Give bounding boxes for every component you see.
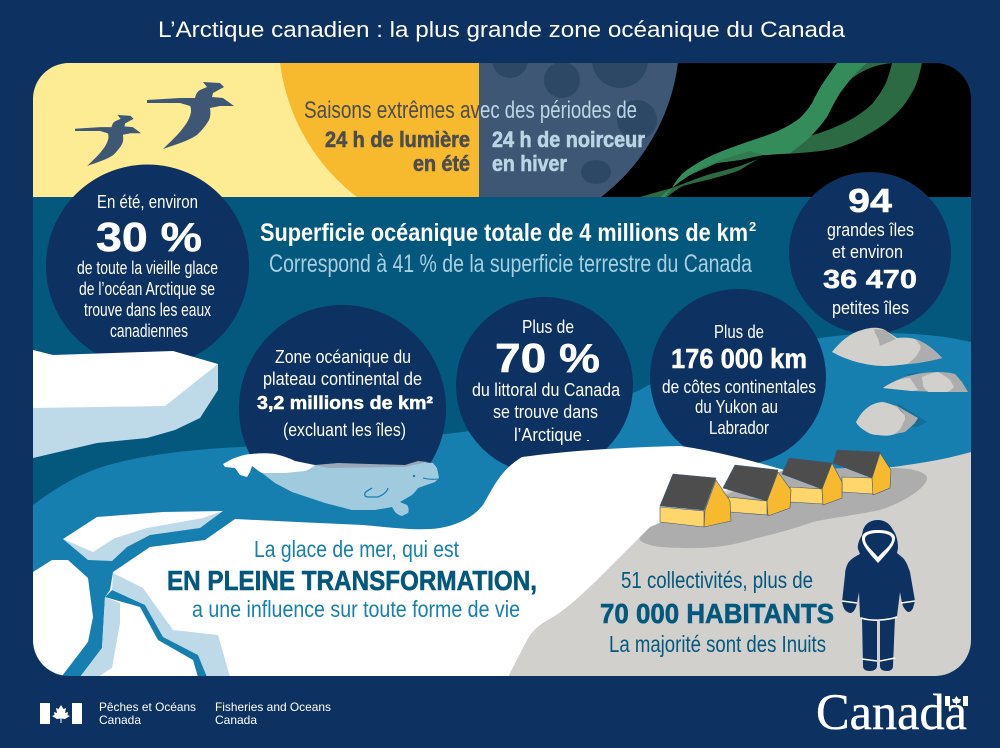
- boot bands: [862, 658, 895, 661]
- icon: person in parka: [842, 520, 915, 671]
- shelf zone text: Zone océanique du: [275, 347, 411, 367]
- islands text: [823, 182, 917, 318]
- icon: moon: [479, 63, 678, 197]
- water crack: [105, 590, 207, 677]
- house 1: [660, 474, 731, 527]
- circle: 30 percent old ice: [46, 164, 249, 368]
- disc: [650, 289, 826, 465]
- islands text: grandes îles: [827, 220, 914, 240]
- land: [508, 452, 971, 677]
- text: extreme seasons: 24 h de noirceur: [492, 127, 645, 152]
- island 2: [883, 372, 968, 392]
- circle: shelf zone: [239, 305, 446, 465]
- text: communities: 51 collectivités, plus de: [621, 567, 813, 593]
- ocean background: [33, 197, 971, 677]
- mouth: [423, 478, 438, 479]
- sea ice with cracks: [33, 446, 784, 677]
- disc: [239, 305, 446, 465]
- circle: islands: [789, 172, 951, 334]
- cuffs and hem: [842, 601, 915, 620]
- eye: [413, 475, 415, 477]
- winter sky: [601, 63, 971, 197]
- shelf zone text: (excluant les îles): [283, 420, 406, 440]
- department name English: [215, 700, 331, 727]
- coast length text: de côtes continentales: [662, 377, 816, 397]
- icon: bird large: [147, 82, 234, 149]
- coast length text: du Yukon au: [695, 397, 778, 417]
- ice edge light strip right: [112, 573, 230, 677]
- department name French: [99, 700, 196, 727]
- logo: Government of Canada flag: [40, 703, 82, 724]
- old ice text: de l’océan Arctique se: [79, 279, 215, 299]
- text: communities: [600, 567, 834, 657]
- old ice text: trouve dans les eaux: [84, 300, 211, 320]
- text: extreme seasons: en hiver: [492, 151, 567, 176]
- coastline text: Plus de: [522, 317, 574, 337]
- text: communities: La majorité sont des Inuits: [609, 631, 826, 657]
- islands text: petites îles: [832, 298, 909, 318]
- circle: 70 percent coastline: [456, 297, 633, 474]
- text: sea ice: EN PLEINE TRANSFORMATION,: [167, 565, 537, 596]
- text: extreme seasons: 24 h de lumière: [325, 127, 470, 152]
- flipper: [365, 488, 388, 497]
- hood opening: [862, 530, 895, 563]
- island 3: [856, 402, 927, 436]
- circle: 176 000 km coast: [650, 289, 826, 465]
- text: sea ice: La glace de mer, qui est: [254, 536, 460, 562]
- text: extreme seasons: Saisons extrêmes av: [304, 97, 480, 124]
- coastline text: se trouve dans: [493, 402, 598, 422]
- ice edge light strip left: [80, 597, 120, 677]
- department name French: Canada: [99, 713, 141, 727]
- island 1: [832, 328, 942, 366]
- panel: sky: [33, 63, 971, 197]
- iceberg: [33, 350, 218, 458]
- islands text: 94: [848, 182, 893, 219]
- shallow water: [33, 333, 971, 676]
- old ice text: de toute la vieille glace: [77, 258, 218, 278]
- department name English: Fisheries and Oceans: [215, 700, 331, 714]
- disc: [46, 164, 249, 368]
- coastline text: l’Arctique: [514, 425, 582, 445]
- coast length text: [662, 322, 816, 438]
- coastline text: 70 %: [495, 335, 600, 381]
- shelf zone text: 3,2 millions de km²: [257, 393, 433, 413]
- house 2: [723, 465, 791, 516]
- islands text: 36 470: [823, 264, 917, 294]
- main ice shelf: [80, 446, 784, 677]
- Canada wordmark: Canada: [816, 685, 967, 741]
- icon: houses: [660, 450, 891, 527]
- coast length text: Plus de: [714, 322, 764, 342]
- islands text: et environ: [832, 242, 903, 262]
- text: extreme seasons: [304, 97, 645, 176]
- text: sea ice: [167, 536, 537, 622]
- text: extreme seasons: ec des périodes de: [480, 97, 637, 124]
- text: sea ice: a une influence sur toute forme de vie: [192, 596, 520, 622]
- coast length text: 176 000 km: [671, 343, 807, 374]
- house 4: [833, 450, 891, 495]
- shelf zone text: [257, 347, 433, 440]
- old ice text: canadiennes: [110, 321, 188, 341]
- text: extreme seasons: en été: [413, 151, 470, 176]
- white back and tail: [223, 453, 315, 477]
- disc: [789, 172, 951, 334]
- aurora borealis: [640, 63, 922, 197]
- old ice text: En été, environ: [97, 192, 198, 212]
- old ice text: [77, 192, 218, 341]
- parka: [842, 520, 915, 621]
- icon: bird small: [75, 115, 141, 166]
- shelf zone text: plateau continental de: [263, 369, 422, 389]
- icon: islands: [832, 328, 968, 436]
- text: communities: 70 000 HABITANTS: [600, 598, 834, 629]
- moon disc: [479, 63, 678, 197]
- summer sky: [33, 63, 357, 197]
- subheading: ocean share: Correspond à 41 % de la superficie terrestre du Canada: [269, 250, 752, 278]
- icon: beluga whale: [223, 453, 439, 516]
- legs: [862, 617, 895, 671]
- title: L’Arctique canadien : la plus grande zone océanique du Canada: [158, 17, 846, 42]
- heading: ocean area: 2: [749, 219, 756, 234]
- heading: ocean area: Superficie océanique totale de 4 millions de km: [260, 219, 748, 247]
- coastline text: du littoral du Canada: [472, 380, 621, 400]
- coastline text: [472, 317, 621, 445]
- coast length text: Labrador: [709, 418, 769, 438]
- grey shoulder line: [315, 461, 428, 468]
- department name French: Pêches et Océans: [99, 700, 196, 714]
- moon craters: [492, 63, 657, 184]
- department name English: Canada: [215, 713, 257, 727]
- icon: sun: [280, 63, 479, 197]
- body: [262, 462, 439, 516]
- left ice block: [33, 560, 93, 676]
- disc: [456, 297, 633, 474]
- village shadow: [639, 468, 927, 548]
- house 3: [782, 458, 842, 505]
- small floe: [63, 511, 223, 561]
- old ice text: 30 %: [96, 214, 202, 260]
